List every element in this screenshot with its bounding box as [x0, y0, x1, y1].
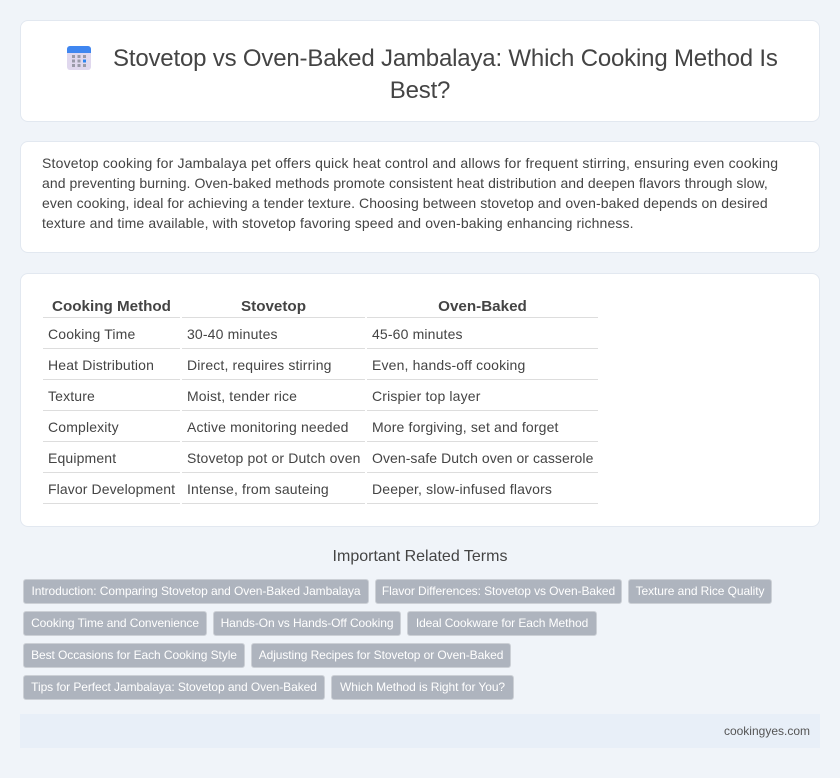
title [113, 45, 778, 104]
comparison table: Active monitoring needed [187, 419, 349, 435]
related terms tags: Ideal Cookware for Each Method [416, 616, 588, 630]
panel: intro paragraph [20, 141, 820, 253]
related terms tags: Tips for Perfect Jambalaya: Stovetop and Oven-Baked [31, 680, 317, 694]
comparison table: Equipment [48, 450, 116, 466]
related terms tags [23, 579, 772, 700]
comparison table: Complexity [48, 419, 119, 435]
intro text: Stovetop cooking for Jambalaya pet offers quick heat control and allows for frequent stirring, ensuring even cooking [42, 155, 778, 171]
comparison table: Even, hands-off cooking [372, 357, 525, 373]
intro text: and preventing burning. Oven-baked methods promote consistent heat distribution and deepen flavors through slow, [42, 175, 768, 191]
title: Best? [390, 77, 450, 104]
related terms tags: Best Occasions for Each Cooking Style [31, 648, 237, 662]
comparison table: Stovetop pot or Dutch oven [187, 450, 361, 466]
title: Stovetop vs Oven-Baked Jambalaya: Which Cooking Method Is [113, 45, 778, 72]
comparison table: Oven-Baked [438, 298, 527, 315]
intro text [42, 155, 778, 231]
related terms tags: Texture and Rice Quality [636, 584, 764, 598]
icon: calendar [67, 46, 91, 70]
comparison table: Direct, requires stirring [187, 357, 332, 373]
intro text: texture and time available, with stovetop favoring speed and oven-baking enhancing richness. [42, 215, 634, 231]
related terms tags: Hands-On vs Hands-Off Cooking [221, 616, 393, 630]
related terms tags: Adjusting Recipes for Stovetop or Oven-Baked [259, 648, 503, 662]
comparison table: Deeper, slow-infused flavors [372, 481, 552, 497]
comparison table [43, 298, 598, 504]
comparison table: Heat Distribution [48, 357, 154, 373]
comparison table: Oven-safe Dutch oven or casserole [372, 450, 593, 466]
related terms tags: Introduction: Comparing Stovetop and Oven-Baked Jambalaya [32, 584, 360, 598]
header card [20, 20, 820, 122]
source credit: cookingyes.com [724, 724, 810, 738]
comparison table: Moist, tender rice [187, 388, 297, 404]
intro text: even cooking, ideal for achieving a tender texture. Choosing between stovetop and oven-baked depends on desired [42, 195, 768, 211]
comparison table: More forgiving, set and forget [372, 419, 559, 435]
comparison table: Texture [48, 388, 95, 404]
comparison table: Cooking Method [52, 298, 171, 315]
related terms heading: Important Related Terms [333, 548, 507, 565]
comparison table: 30-40 minutes [187, 326, 278, 342]
related terms tags: Which Method is Right for You? [340, 680, 505, 694]
comparison table: 45-60 minutes [372, 326, 463, 342]
comparison table: Stovetop [241, 298, 306, 315]
comparison table: Intense, from sauteing [187, 481, 329, 497]
related terms tags: Cooking Time and Convenience [31, 616, 199, 630]
comparison table: Cooking Time [48, 326, 135, 342]
footer bar [20, 714, 820, 748]
comparison table: Crispier top layer [372, 388, 481, 404]
related terms tags: Flavor Differences: Stovetop vs Oven-Baked [382, 584, 615, 598]
panel: comparison table [20, 273, 820, 527]
comparison table: Flavor Development [48, 481, 175, 497]
